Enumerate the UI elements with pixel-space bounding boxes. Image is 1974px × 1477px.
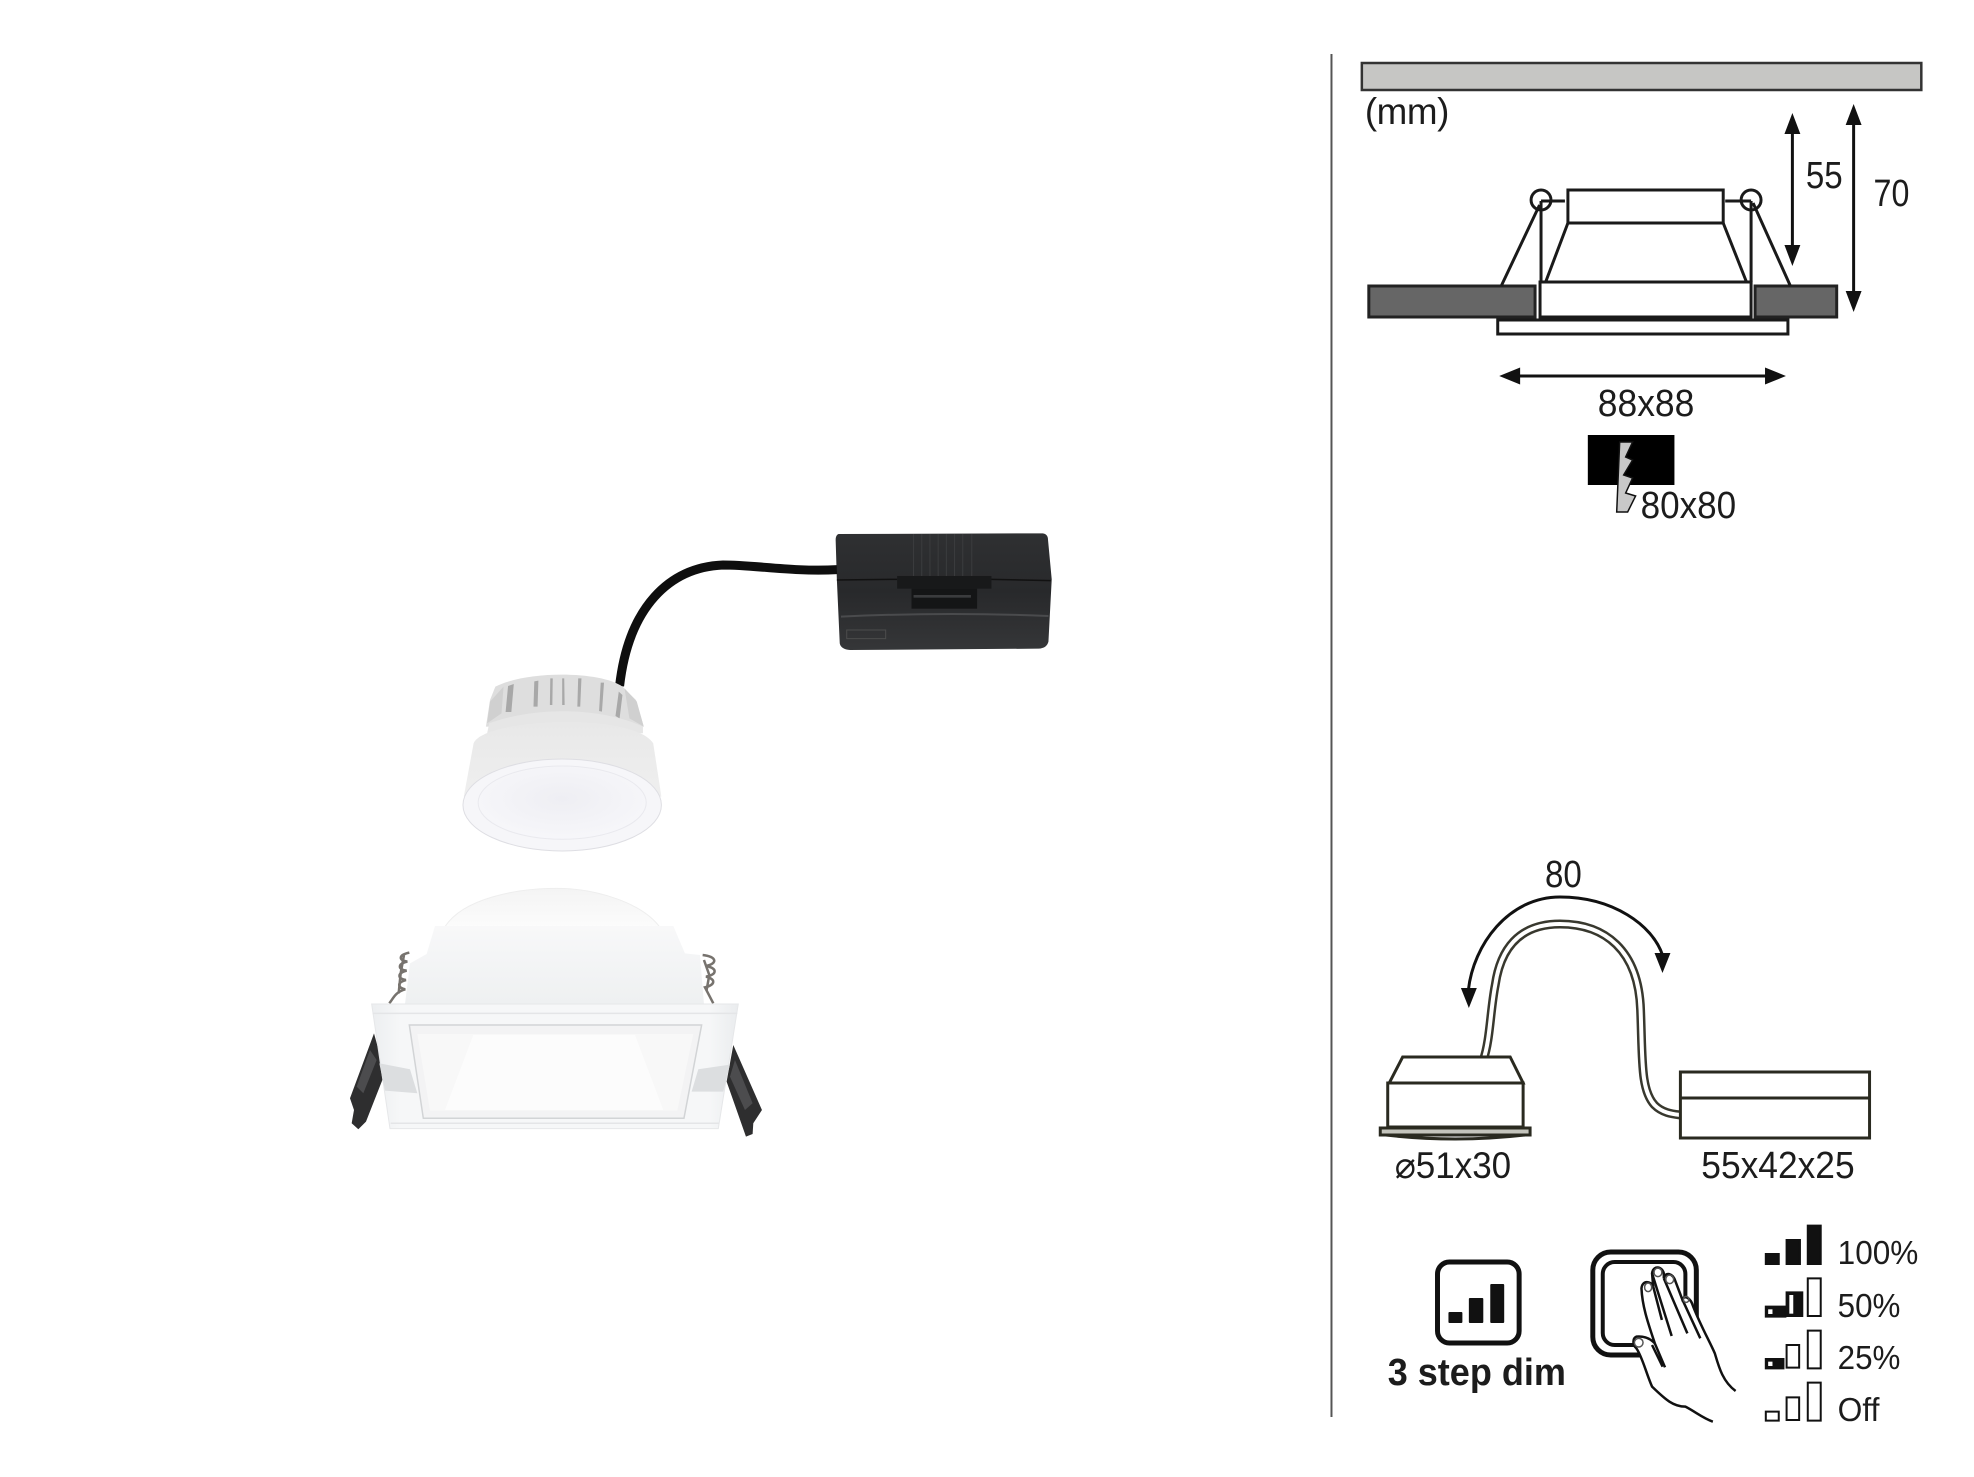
panel: installation dimensions <box>1362 63 1921 527</box>
photo: square recessed fixture <box>350 888 762 1137</box>
arrow: cable length arc <box>1461 897 1670 1008</box>
LED lens <box>463 759 661 851</box>
back housing <box>405 926 704 1004</box>
vertical divider <box>1330 54 1332 1417</box>
driver box <box>836 533 1052 650</box>
label: 80: 80 <box>1545 854 1582 896</box>
icon: cut-out symbol <box>1588 435 1674 512</box>
unit label: (mm) <box>1365 91 1449 132</box>
icon: hand on switch <box>1633 1267 1736 1422</box>
panel: module and driver dimensions <box>1380 854 1870 1187</box>
ceiling panel left <box>1369 286 1535 317</box>
driver box outline <box>1680 1072 1870 1138</box>
label: 100%: 100% <box>1838 1234 1918 1271</box>
fixture cross-section <box>1498 190 1790 334</box>
label: 3 step dim: 3 step dim <box>1388 1352 1566 1394</box>
front frame <box>372 1004 738 1129</box>
right black clip <box>727 1045 762 1137</box>
cable <box>620 565 837 686</box>
label: 80x80: 80x80 <box>1641 485 1736 527</box>
dim levels legend <box>1766 1226 1821 1421</box>
level off bars <box>1766 1383 1821 1421</box>
label: 88x88: 88x88 <box>1598 383 1694 425</box>
icon: wall switch <box>1593 1252 1696 1355</box>
arrow: 70 height <box>1846 104 1862 312</box>
label: 55x42x25: 55x42x25 <box>1701 1145 1855 1187</box>
cable outline <box>1483 924 1680 1115</box>
frame reflections <box>379 1063 730 1093</box>
ceiling bar <box>1362 63 1921 90</box>
label: diameter 51x30: ⌀51x30 <box>1395 1145 1511 1186</box>
LED heat sink with ribs <box>486 675 644 733</box>
arrow: 55 height <box>1784 113 1800 266</box>
icon: dim bars in rounded square <box>1438 1262 1519 1343</box>
inner reflector <box>417 1034 693 1111</box>
spring clips: metal coils <box>389 953 715 1003</box>
photo: LED module with cable and driver <box>463 533 1052 851</box>
frame bevels <box>373 1013 737 1123</box>
panel: 3 step dim <box>1388 1226 1918 1428</box>
label: 50%: 50% <box>1838 1287 1900 1324</box>
label: 25%: 25% <box>1838 1339 1900 1376</box>
label: 70: 70 <box>1874 173 1909 215</box>
inner square opening <box>409 1025 702 1118</box>
right column scaled into place <box>1331 54 1921 1428</box>
level 50% bars <box>1766 1278 1821 1317</box>
left black clip <box>350 1033 385 1129</box>
arrow: 88x88 width <box>1499 368 1786 384</box>
label: 55: 55 <box>1806 155 1843 197</box>
finger nails <box>1634 1268 1689 1347</box>
LED body <box>464 722 661 797</box>
label: Off: Off <box>1838 1391 1880 1428</box>
level 100% bars <box>1766 1226 1821 1264</box>
ceiling panel right <box>1755 286 1837 317</box>
dome <box>445 888 661 928</box>
level 25% bars <box>1766 1331 1821 1368</box>
LED module outline <box>1380 1057 1530 1139</box>
